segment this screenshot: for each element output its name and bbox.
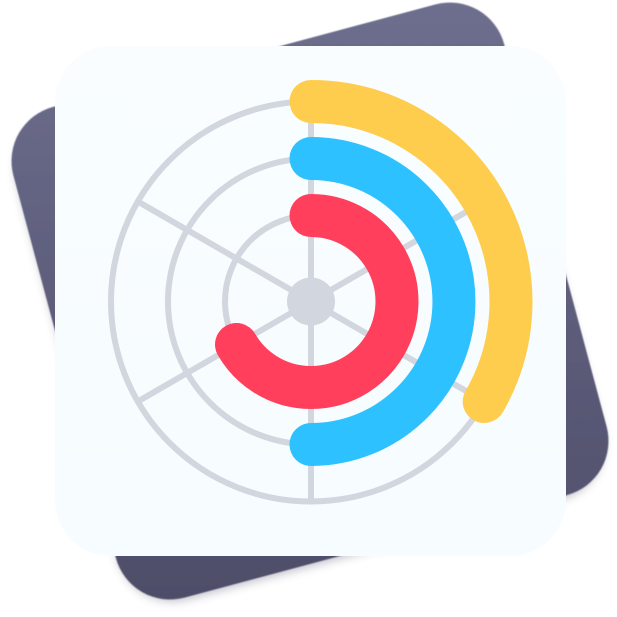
grid: spokes [138, 102, 484, 502]
grid: concentric rings [111, 102, 511, 502]
arc: red inner ring [236, 216, 397, 387]
panel: front light card [55, 46, 566, 556]
chart: polar grid [111, 102, 511, 502]
arc: blue middle ring [311, 158, 454, 444]
grid: center hub [287, 278, 335, 326]
arc: yellow outer ring [311, 102, 511, 402]
